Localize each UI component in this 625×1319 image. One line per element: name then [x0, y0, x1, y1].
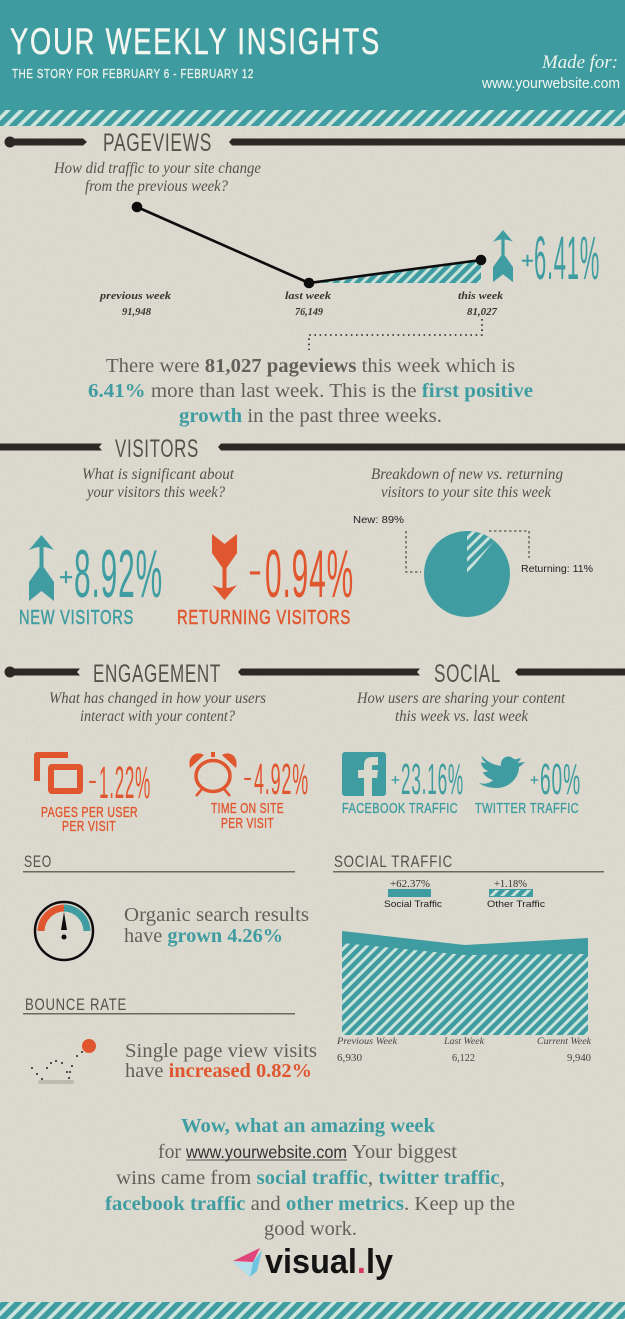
icon: new visitors up arrow	[29, 535, 54, 601]
heading: visitors	[0, 435, 625, 463]
pie chart: new vs returning: New: 89%	[353, 515, 404, 526]
heading: bounce rate: BOUNCE RATE	[25, 995, 127, 1014]
line chart: pageviews: 76,149	[295, 307, 323, 318]
label: twitter traffic: TWITTER TRAFFIC	[475, 801, 579, 817]
stat: time on site: -	[243, 762, 252, 792]
line chart: pageviews: this week	[458, 291, 503, 302]
heading: engagement and social: ENGAGEMENT	[93, 660, 221, 688]
line chart: pageviews: previous week	[99, 291, 171, 302]
icon: returning visitors down arrow	[212, 534, 237, 600]
header banner	[0, 0, 625, 110]
area chart: social traffic: 9,940	[567, 1052, 591, 1064]
closing paragraph: good work.	[264, 1218, 357, 1240]
question: breakdown	[371, 466, 563, 501]
stat: time on site	[243, 755, 309, 804]
paragraph: pageviews summary: growth in the past three weeks.	[179, 405, 442, 427]
legend: social traffic: Social Traffic	[384, 899, 442, 910]
dotted connector	[309, 319, 482, 350]
closing paragraph: for	[158, 1141, 181, 1163]
label: new visitors: NEW VISITORS	[19, 607, 134, 629]
question: visitors: your visitors this week?	[85, 484, 225, 501]
stat: returning visitors	[248, 536, 354, 612]
question: visitors: What is significant about	[82, 466, 235, 483]
heading: visitors: VISITORS	[115, 435, 199, 463]
legend: other traffic	[487, 879, 545, 910]
stat: new visitors: +	[59, 564, 73, 591]
text: 0.94%	[265, 536, 354, 612]
stat: twitter traffic	[530, 755, 581, 804]
text: seo: Organic search results	[124, 904, 309, 926]
closing paragraph: facebook traffic and other metrics. Keep up the	[105, 1193, 515, 1215]
stat: pageviews change: +	[521, 248, 534, 273]
pie chart: new vs returning	[353, 515, 593, 617]
legend: other traffic: Other Traffic	[487, 899, 545, 910]
icon: gauge	[35, 902, 93, 960]
text: seo: have grown 4.26%	[124, 925, 283, 947]
heading: pageviews: PAGEVIEWS	[103, 129, 212, 157]
icon: up arrow	[493, 230, 513, 282]
area chart: social traffic: 6,122	[452, 1052, 475, 1064]
logo: visual.ly: visual.ly	[265, 1243, 393, 1281]
question: pageviews: from the previous week?	[85, 178, 228, 195]
icon: bounce	[31, 1039, 96, 1084]
question: engagement	[49, 690, 266, 725]
closing paragraph: www.yourwebsite.com	[185, 1142, 347, 1162]
legend: social traffic: +62.37%	[390, 879, 430, 890]
area chart: social traffic	[336, 931, 592, 1064]
legend: other traffic: +1.18%	[494, 879, 527, 890]
text: 1.22%	[99, 757, 151, 808]
stat: facebook traffic	[391, 755, 464, 804]
label: facebook traffic: FACEBOOK TRAFFIC	[342, 801, 458, 817]
question: social: this week vs. last week	[395, 708, 529, 725]
question: engagement: interact with your content?	[80, 708, 235, 725]
stat: new visitors	[59, 536, 163, 612]
top stripe band	[0, 110, 625, 126]
paragraph: pageviews summary: There were 81,027 pageviews this week which is	[106, 355, 515, 377]
label: time on site	[211, 801, 284, 832]
legend: social traffic	[384, 879, 442, 910]
stat: facebook traffic: +	[391, 772, 400, 789]
question: social	[356, 690, 566, 725]
text: bounce rate	[125, 1040, 317, 1082]
stat: pageviews change	[521, 224, 600, 292]
title: YOUR WEEKLY INSIGHTS	[10, 21, 381, 62]
area chart: social traffic: Current Week	[537, 1037, 592, 1047]
heading: engagement and social: SOCIAL	[434, 660, 501, 688]
text: seo	[124, 904, 309, 947]
line chart: pageviews: 81,027	[467, 307, 498, 318]
label: returning visitors: RETURNING VISITORS	[177, 607, 351, 629]
icon: pages	[37, 755, 80, 791]
bottom stripe band	[0, 1302, 625, 1319]
heading: seo: SEO	[24, 852, 52, 871]
heading: social traffic: SOCIAL TRAFFIC	[334, 852, 453, 871]
line chart: pageviews: 91,948	[122, 307, 151, 318]
question: pageviews: How did traffic to your site change	[53, 160, 261, 177]
heading: engagement and social	[4, 660, 625, 688]
question: social: How users are sharing your content	[356, 690, 566, 707]
made for label: Made for:	[541, 52, 618, 73]
stat: returning visitors: -	[248, 548, 262, 592]
pie chart: new vs returning: Returning: 11%	[521, 564, 593, 575]
question: engagement: What has changed in how your users	[49, 690, 266, 707]
text: bounce rate: have increased 0.82%	[125, 1060, 312, 1082]
label: pages per user: PER VISIT	[62, 819, 116, 835]
question: pageviews	[53, 160, 261, 195]
closing paragraph: Your biggest	[352, 1141, 457, 1163]
question: visitors	[82, 466, 235, 501]
question: breakdown: visitors to your site this week	[381, 484, 552, 501]
label: time on site: PER VISIT	[221, 816, 274, 832]
closing paragraph: wins came from social traffic , twitter traffic ,	[116, 1167, 505, 1189]
heading: pageviews	[4, 129, 625, 157]
stat: pages per user	[88, 757, 151, 808]
stat: twitter traffic: +	[530, 772, 539, 789]
closing paragraph: Wow, what an amazing week	[181, 1115, 436, 1137]
icon: twitter bird	[479, 756, 525, 788]
line chart: pageviews: last week	[285, 291, 331, 302]
closing paragraph	[105, 1115, 515, 1240]
question: breakdown: Breakdown of new vs. returning	[371, 466, 563, 483]
text: 23.16%	[401, 755, 464, 804]
label: time on site: TIME ON SITE	[211, 801, 284, 817]
area chart: social traffic: Previous Week	[336, 1037, 398, 1047]
date range subtitle: THE STORY FOR FEBRUARY 6 - FEBRUARY 12	[12, 67, 254, 81]
text: bounce rate: Single page view visits	[125, 1040, 317, 1062]
text: 8.92%	[74, 536, 163, 612]
paragraph: pageviews summary: 6.41% more than last week. This is the first positive	[88, 380, 533, 402]
line chart: pageviews	[99, 202, 503, 318]
icon: facebook	[342, 752, 386, 796]
icon: alarm clock	[189, 752, 237, 796]
area chart: social traffic: 6,930	[337, 1052, 363, 1064]
label: pages per user	[41, 805, 138, 835]
paragraph: pageviews summary	[88, 355, 533, 427]
text: 4.92%	[254, 755, 309, 804]
label: pages per user: PAGES PER USER	[41, 805, 138, 821]
stat: pages per user: -	[88, 765, 97, 795]
area chart: social traffic: Last Week	[443, 1037, 485, 1047]
